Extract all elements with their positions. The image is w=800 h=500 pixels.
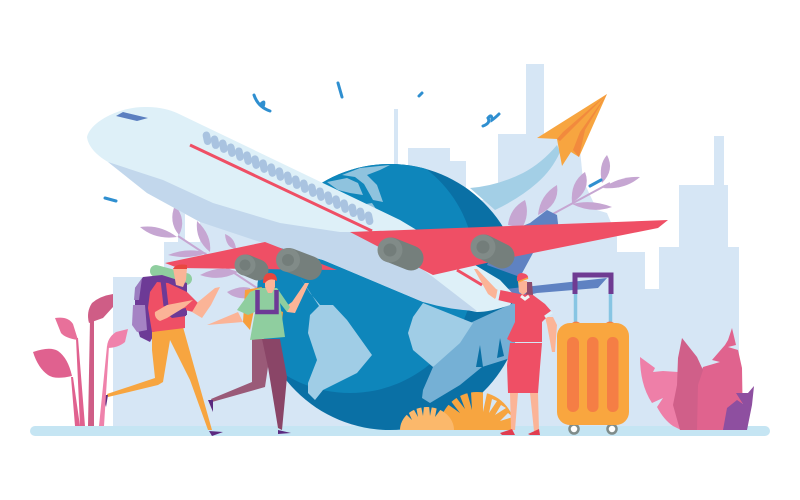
man: purple belt	[165, 308, 186, 318]
globe	[257, 164, 520, 430]
man: neck and face	[173, 268, 187, 287]
man: front leg and back leg	[107, 327, 212, 430]
left wing	[165, 242, 337, 270]
engine 2	[276, 248, 310, 272]
tail fin and stabiliser	[487, 210, 607, 302]
woman: left arm	[207, 312, 243, 325]
suitcase: panels	[567, 337, 618, 412]
passenger windows	[202, 131, 374, 226]
woman: front leg	[262, 339, 287, 430]
travel illustration	[30, 64, 770, 436]
belly	[108, 162, 477, 311]
woman: back leg	[211, 339, 268, 402]
man: hair	[173, 264, 187, 269]
suitcase	[557, 275, 629, 434]
man traveller	[103, 264, 223, 436]
fan plant: light notches	[405, 405, 441, 420]
engine 1	[234, 254, 258, 276]
left pink plant	[33, 294, 128, 426]
fan plant: light	[400, 407, 454, 430]
paper plane trail	[470, 145, 560, 210]
land: africa	[408, 303, 473, 367]
fuselage	[87, 107, 515, 312]
man: shirt	[148, 282, 198, 332]
man: forearm	[155, 300, 193, 321]
man: pocket	[132, 305, 147, 332]
paper plane	[537, 94, 607, 166]
engine 3	[378, 238, 411, 262]
suitcase: rods	[576, 294, 610, 323]
stewardess: hair	[526, 282, 533, 295]
land: medium	[422, 300, 520, 403]
stewardess: skirt	[507, 343, 542, 393]
man: backpack	[135, 275, 187, 342]
stewardess: legs	[510, 393, 539, 431]
man: strap	[163, 280, 166, 306]
land: south america	[300, 277, 372, 400]
cockpit window	[116, 112, 148, 121]
woman: orange pack	[243, 287, 283, 330]
woman: shirt	[237, 288, 290, 340]
skyline	[113, 64, 739, 427]
woman: face	[265, 278, 275, 293]
fan plant: orange	[439, 392, 515, 430]
left leaf branch	[140, 205, 260, 298]
stewardess	[474, 269, 557, 435]
suitcase: tabs	[572, 322, 614, 323]
suitcase: handle	[575, 275, 611, 294]
stewardess: jacket	[498, 290, 552, 342]
suitcase: wheels	[570, 424, 616, 434]
fuselage stripe	[190, 145, 482, 285]
stewardess: cuffs	[497, 290, 552, 317]
man: backpack highlight	[134, 278, 142, 300]
man: bedroll	[156, 271, 186, 279]
land: north	[327, 165, 390, 212]
stewardess: shoes	[500, 429, 540, 435]
woman: hair	[263, 273, 277, 283]
right pink plant	[640, 328, 754, 430]
woman: straps	[258, 290, 276, 312]
suitcase: body	[557, 323, 629, 425]
land: notches	[476, 338, 504, 367]
stewardess: lowered arm	[545, 317, 557, 352]
engine 4	[470, 234, 502, 260]
fan plant: orange notches	[446, 392, 513, 421]
woman: shoes	[208, 400, 291, 434]
man: shoes	[103, 395, 223, 436]
stewardess: raised arm	[474, 269, 500, 299]
man: outstretched arm	[192, 287, 220, 318]
stewardess: collar	[521, 296, 529, 299]
confetti squiggles	[105, 83, 601, 201]
right wing	[350, 220, 668, 275]
ground	[30, 426, 770, 436]
woman: right arm	[285, 283, 309, 313]
stewardess: scarf	[518, 278, 528, 282]
stewardess: face	[518, 281, 527, 295]
stewardess: hat	[517, 273, 528, 281]
woman traveller	[207, 273, 309, 434]
right leaf branch	[508, 155, 640, 228]
